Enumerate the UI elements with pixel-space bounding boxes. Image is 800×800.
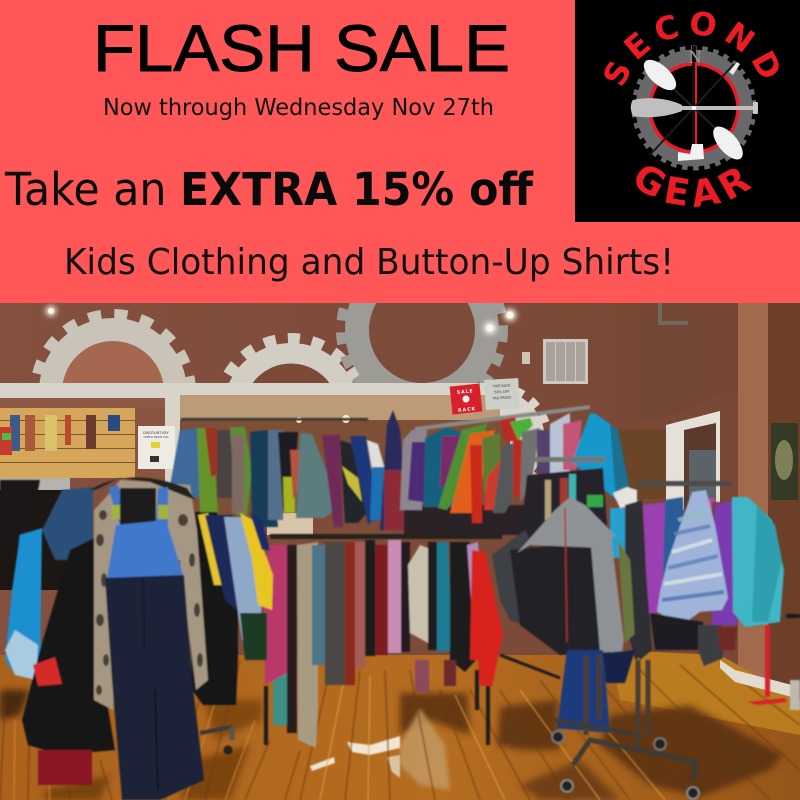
wooden floor: [0, 650, 800, 800]
logo: Second Gear: [575, 0, 800, 222]
pipe: [660, 303, 688, 323]
air vent: [522, 339, 588, 384]
left jackets behind bib: [0, 480, 273, 785]
baseboard: [720, 660, 792, 697]
icon: crossed paddles and compass: [631, 46, 758, 164]
title: FLASH SALE: FLASH SALE: [93, 11, 510, 85]
headline: extra discount: Take an EXTRA 15% off: [4, 163, 534, 216]
sign: sale rack: RACK: [458, 406, 476, 414]
logo text: GEAR: GEAR: [636, 166, 752, 208]
icon: crossed paddles and compass: N: [688, 47, 702, 67]
sign: sale rack: SALE: [457, 388, 474, 396]
subheading: eligible items: Kids Clothing and Button-Up Shirts!: [64, 242, 674, 283]
icon: grey gear ring: [635, 49, 753, 167]
sign: this rack discount: TAG PRICE!: [492, 395, 512, 401]
right wall, pillar and doorway: [612, 303, 800, 703]
sign: this rack discount: [484, 378, 520, 410]
front right jackets: [610, 481, 784, 666]
red banner background: [0, 0, 800, 303]
ceiling soffit and light room: [0, 383, 490, 398]
sign: this rack discount: THIS RACK: [492, 384, 511, 389]
back rack jackets: [168, 418, 387, 527]
back wall: [0, 303, 738, 665]
center rack hanging garments: [263, 534, 503, 748]
leopard coat: [94, 480, 208, 710]
sign: discount key: DISCOUNT KEY: [143, 431, 170, 435]
slatwall display: [0, 408, 165, 590]
logo text: SECOND: SECOND: [604, 12, 779, 86]
sign: sale rack: [450, 384, 482, 414]
sale rack jackets: [380, 405, 630, 535]
photo: store interior with clothing racks: [0, 249, 800, 800]
sign: this rack discount: 50% OFF: [494, 390, 510, 394]
hangers: [90, 477, 195, 500]
blue and navy snow bib: [105, 485, 204, 800]
center front jacket: [492, 497, 652, 733]
sign: discount key: CHECK PRICE TAG: [143, 435, 169, 439]
sign: discount key: [138, 426, 175, 469]
subtitle: sale dates: Now through Wednesday Nov 27th: [103, 95, 494, 121]
rack with dark mixed clothes: [520, 457, 637, 545]
wall gears: [32, 303, 508, 383]
rack legs and wheels: [200, 655, 699, 799]
ceiling lights: [46, 306, 516, 423]
red pump stand: [747, 614, 800, 710]
